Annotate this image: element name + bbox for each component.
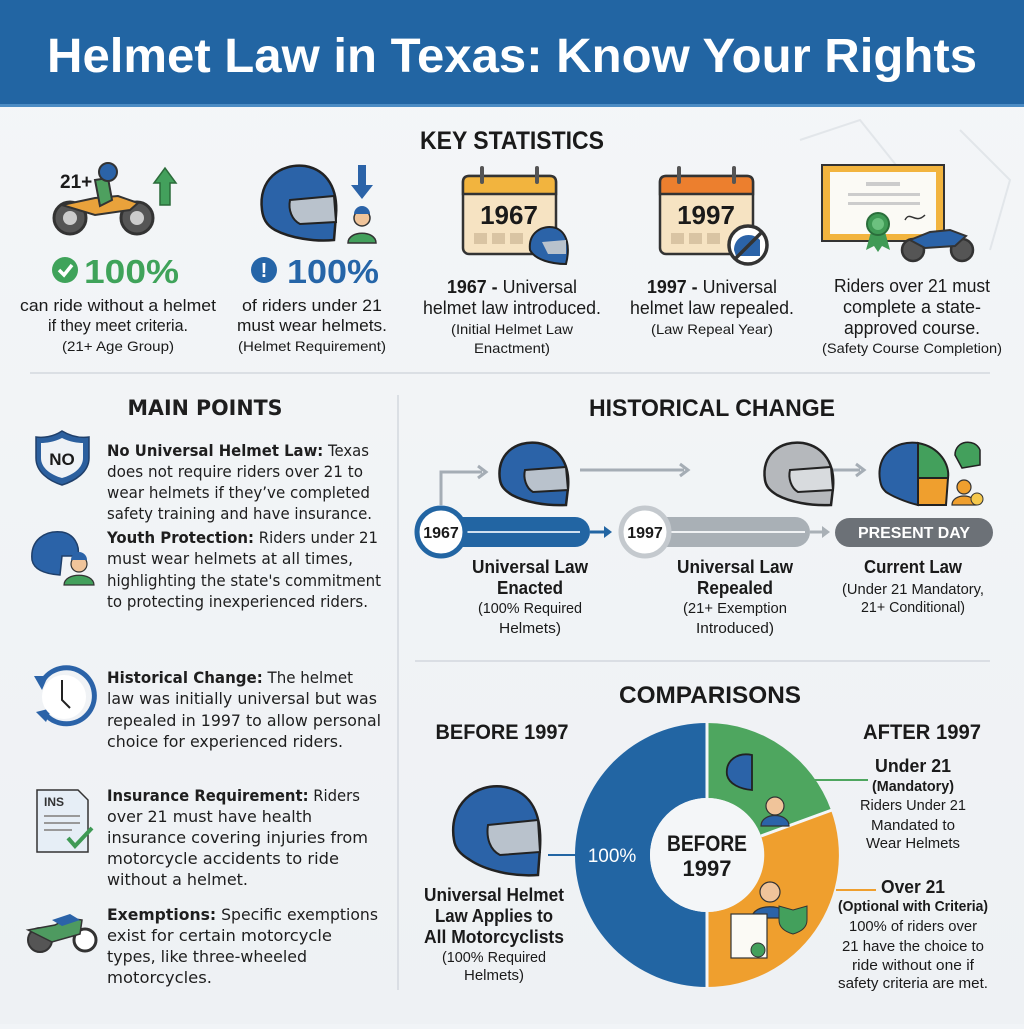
point: no universal law: does not require riders over 21 to <box>107 462 363 481</box>
after 1997 labels: 100% of riders over <box>849 918 977 935</box>
point: youth protection: must wear helmets at all times, <box>107 549 353 568</box>
stat 2: under 21 must wear: (Helmet Requirement) <box>238 338 386 354</box>
labels <box>472 557 984 637</box>
before 1997 helmet and text: Law Applies to <box>435 906 553 926</box>
stat 2: under 21 must wear: of riders under 21 <box>242 296 382 315</box>
icon: check <box>52 257 78 283</box>
timeline bars: 1967 <box>423 525 459 542</box>
heading: historical change: HISTORICAL CHANGE <box>589 395 835 422</box>
icon: calendar 1997: 1997 <box>677 200 735 230</box>
stat 4: 1997 <box>630 166 794 337</box>
after 1997 labels: safety criteria are met. <box>838 975 988 992</box>
heading: main points: MAIN POINTS <box>128 396 282 420</box>
point: insurance requirement: insurance covering injuries from <box>107 828 368 847</box>
labels: Helmets) <box>499 620 561 637</box>
stat 4: 1997: helmet law repealed. <box>630 298 794 318</box>
labels: Enacted <box>497 578 563 598</box>
point: historical change <box>34 668 381 751</box>
donut chart: BEFORE <box>667 831 747 856</box>
stat 3: 1967: Enactment) <box>474 340 550 356</box>
labels: Universal Law <box>677 557 794 577</box>
stat 2: under 21 must wear: 100% <box>287 253 379 290</box>
stat 5: safety course: approved course. <box>844 318 980 338</box>
point: youth protection <box>32 528 381 611</box>
stat 1: 21+ ride without helmet: if they meet criteria. <box>48 316 188 335</box>
arrows <box>441 464 864 505</box>
timeline bars <box>417 508 993 556</box>
stat 3: 1967: 1967 - Universal <box>447 277 577 297</box>
after 1997 labels: (Optional with Criteria) <box>838 898 988 915</box>
icon: insurance document: INS <box>44 795 64 809</box>
helmets <box>499 442 983 505</box>
point: exemptions <box>28 905 378 987</box>
icon: shield NO <box>36 431 89 485</box>
stat 5: safety course: (Safety Course Completion) <box>822 340 1002 356</box>
icons in slices <box>727 754 752 790</box>
point: exemptions: Exemptions: Specific exemptions <box>107 905 378 924</box>
point: no universal law <box>36 431 372 523</box>
stat 3: 1967 <box>423 166 601 356</box>
icon: certificate and motorcycle <box>822 165 973 261</box>
icon: calendar 1967: 1967 <box>480 200 538 230</box>
stat 5: safety course: Riders over 21 must <box>834 276 990 296</box>
icon: motorcycle <box>28 914 96 952</box>
labels: Current Law <box>864 557 963 577</box>
stat 4: 1997: 1997 - Universal <box>647 277 777 297</box>
stat 1: 21+ ride without helmet: (21+ Age Group) <box>62 338 174 354</box>
heading: comparisons: COMPARISONS <box>619 682 801 709</box>
panel: comparisons: AFTER 1997 <box>863 721 981 744</box>
timeline bars: PRESENT DAY <box>858 525 970 542</box>
decorative hex <box>800 120 1010 250</box>
point: exemptions: exist for certain motorcycle <box>107 926 332 945</box>
point: no universal law: No Universal Helmet Law: Texas <box>107 441 369 460</box>
labels: (100% Required <box>478 600 582 617</box>
before 1997 helmet and text <box>424 786 576 984</box>
after 1997 labels: Riders Under 21 <box>860 797 966 814</box>
before 1997 helmet and text: All Motorcyclists <box>424 927 564 947</box>
after 1997 labels: Wear Helmets <box>866 835 960 852</box>
point: historical change: law was initially universal but was <box>107 689 377 708</box>
icon: motorcycle rider: 21+ <box>60 172 92 193</box>
before 1997 helmet and text: (100% Required <box>442 949 546 966</box>
donut chart <box>575 722 839 988</box>
labels: Introduced) <box>696 620 774 637</box>
stat 3: 1967: (Initial Helmet Law <box>451 321 574 337</box>
donut chart: 1997 <box>683 856 731 881</box>
point: insurance requirement: motorcycle accidents to ride <box>107 849 339 868</box>
before 1997 helmet and text: Universal Helmet <box>424 885 564 905</box>
after 1997 labels: Under 21 <box>875 756 951 776</box>
labels: Universal Law <box>472 557 589 577</box>
stat 5: safety course <box>822 165 1002 356</box>
labels: Repealed <box>697 578 773 598</box>
point: insurance requirement: Insurance Requirement: Riders <box>107 786 360 805</box>
stat 2: under 21 must wear: must wear helmets. <box>237 316 387 335</box>
panel: comparisons <box>424 682 988 992</box>
icon: exclamation <box>251 257 277 283</box>
point: youth protection: to protecting inexperienced riders. <box>107 592 368 611</box>
point: insurance requirement: without a helmet. <box>107 870 248 889</box>
after 1997 labels: Over 21 <box>881 877 945 897</box>
point: historical change: choice for experienced riders. <box>107 732 343 751</box>
point: insurance requirement: over 21 must have health <box>107 807 312 826</box>
icon: clock with arrow <box>34 668 94 724</box>
point: youth protection: highlighting the state's commitment <box>107 571 381 590</box>
heading: key statistics: KEY STATISTICS <box>420 127 604 155</box>
panel: historical change <box>417 395 993 637</box>
stat 5: safety course: complete a state- <box>843 297 981 317</box>
icon: calendar 1967 <box>463 166 568 264</box>
icon: helmet and youth <box>32 532 94 585</box>
panel: comparisons: BEFORE 1997 <box>436 721 568 744</box>
point: historical change: Historical Change: The helmet <box>107 668 353 687</box>
icon: shield NO: NO <box>49 450 75 469</box>
header banner <box>0 0 1024 107</box>
after 1997 labels: 21 have the choice to <box>842 938 984 955</box>
stat 4: 1997: (Law Repeal Year) <box>651 321 773 337</box>
after 1997 labels: (Mandatory) <box>872 778 954 795</box>
labels: (21+ Exemption <box>683 600 787 617</box>
icon: calendar 1997 <box>660 166 767 264</box>
stat 2: under 21 must wear: ! <box>261 260 267 282</box>
stat 1: 21+ ride without helmet: can ride without a helmet <box>20 296 216 315</box>
donut chart: 100% <box>588 846 636 867</box>
before 1997 helmet and text: Helmets) <box>464 967 524 984</box>
point: insurance requirement <box>37 786 368 889</box>
icon: motorcycle rider <box>54 163 176 234</box>
labels: 21+ Conditional) <box>861 599 965 616</box>
point: youth protection: Youth Protection: Riders under 21 <box>106 528 378 547</box>
stat 1: 21+ ride without helmet <box>20 163 216 354</box>
timeline bars: 1997 <box>627 525 663 542</box>
panel: main points <box>28 396 381 987</box>
icon: insurance document <box>37 790 92 852</box>
stat 2: under 21 must wear <box>237 165 387 354</box>
title: Helmet Law in Texas: Know Your Rights <box>47 30 977 83</box>
icon: helmet with arrow <box>262 165 376 243</box>
point: exemptions: motorcycles. <box>107 968 212 987</box>
after 1997 labels: ride without one if <box>852 957 975 974</box>
after 1997 labels <box>800 756 988 992</box>
point: exemptions: types, like three-wheeled <box>107 947 307 966</box>
point: no universal law: wear helmets if they’ve completed <box>107 483 370 502</box>
point: no universal law: safety training and have insurance. <box>107 504 372 523</box>
stat 3: 1967: helmet law introduced. <box>423 298 601 318</box>
labels: (Under 21 Mandatory, <box>842 581 984 598</box>
stat 1: 21+ ride without helmet: 100% <box>84 253 179 290</box>
point: historical change: repealed in 1997 to allow personal <box>107 711 381 730</box>
after 1997 labels: Mandated to <box>871 817 955 834</box>
